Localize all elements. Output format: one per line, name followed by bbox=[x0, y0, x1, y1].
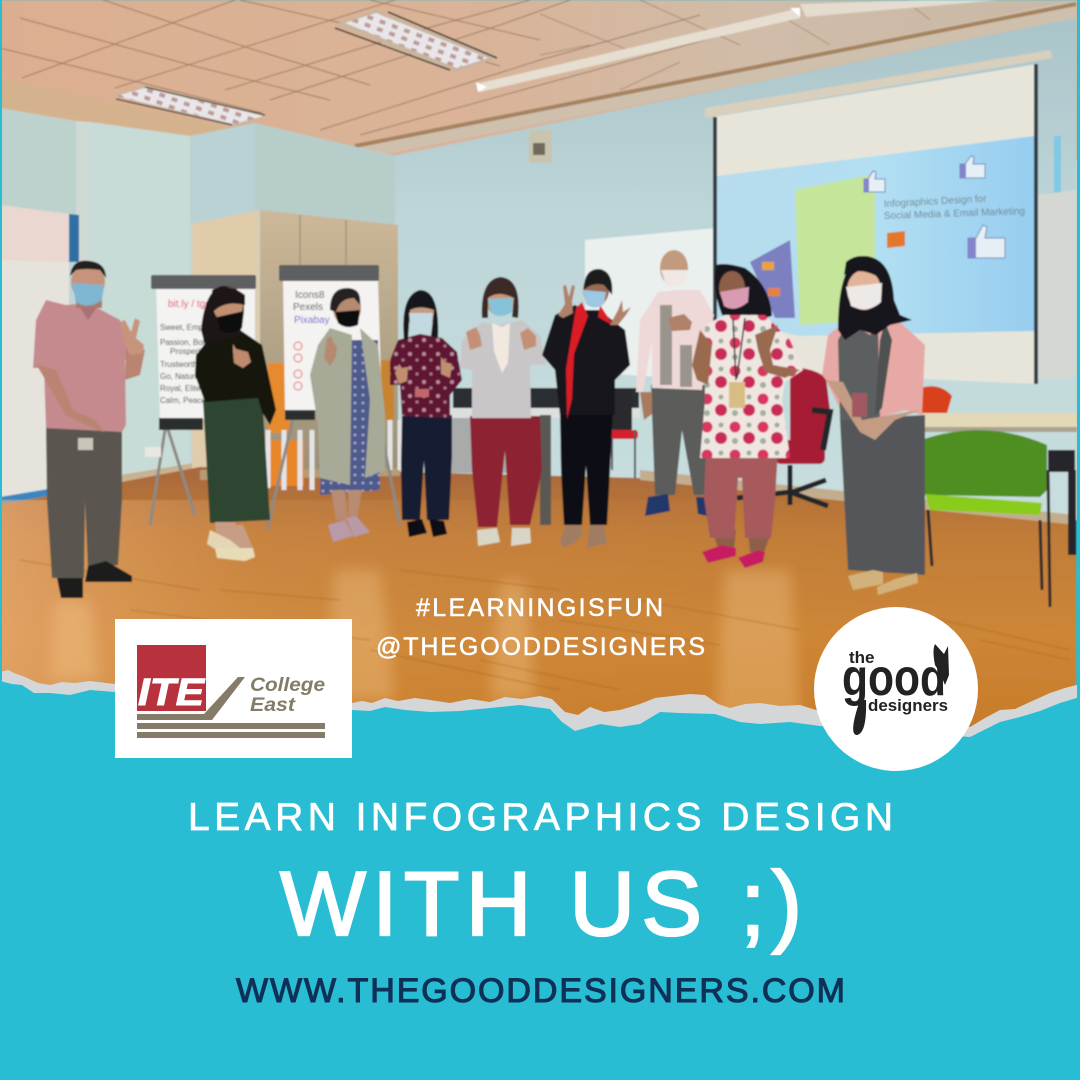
person 2: woman in black top and green skirt bbox=[195, 286, 276, 561]
room: floor bbox=[0, 467, 1076, 745]
flipchart right bbox=[267, 265, 400, 530]
ceiling bulkheads bbox=[0, 78, 232, 140]
projected slide title: Infographics Design for bbox=[884, 194, 988, 210]
flipchart left: Sweet, Empower bbox=[160, 323, 221, 332]
hashtag text bbox=[376, 594, 705, 661]
projector screen bbox=[705, 50, 1076, 384]
table and stacked chairs bbox=[266, 360, 640, 525]
logo stripes bbox=[137, 677, 325, 738]
projected social post panel bbox=[795, 174, 875, 325]
green chair bbox=[920, 430, 1050, 607]
heading: learn infographics design: LEARN INFOGRAPHICS DESIGN bbox=[188, 796, 893, 839]
room: wall base bbox=[0, 100, 1080, 520]
logo: ITE College East: East bbox=[250, 695, 296, 716]
long table right bbox=[920, 413, 1077, 555]
heading: with us: WITH US ;) bbox=[280, 854, 802, 955]
person 4: woman in maroon blouse bbox=[390, 290, 462, 537]
flipchart right: Pexels bbox=[293, 302, 323, 313]
person 3: woman in grey cardigan bbox=[310, 288, 385, 542]
room: ceiling bbox=[0, 0, 1080, 160]
person 8: woman in floral top bbox=[692, 264, 803, 568]
photo: training room group bbox=[0, 0, 1080, 745]
College East wordmark: College bbox=[250, 675, 325, 696]
logo: the good designers: good bbox=[842, 649, 946, 707]
logo: the good designers: the bbox=[849, 648, 874, 667]
ITE red square mark bbox=[137, 645, 206, 714]
logo: ITE College East bbox=[115, 619, 352, 758]
room: left wall and pillars bbox=[0, 108, 395, 505]
person 5: woman in grey blazer bbox=[460, 277, 546, 546]
flipchart left: Go, Nature bbox=[160, 372, 200, 381]
wall socket bbox=[145, 447, 161, 457]
flipchart left: Royal, Elite bbox=[160, 384, 201, 393]
ITE red square mark: ITE bbox=[138, 672, 206, 714]
flipchart left bbox=[150, 275, 256, 525]
orange seat behind bbox=[920, 386, 952, 420]
hashtag text: #LEARNINGISFUN bbox=[416, 594, 663, 622]
room: back wall bbox=[392, 18, 1076, 530]
projected colourful phone graphic bbox=[750, 240, 795, 318]
room: wall sensor box bbox=[529, 130, 552, 163]
hashtag text: @THEGOODDESIGNERS bbox=[376, 633, 705, 661]
person 6: woman in black jacket bbox=[542, 269, 631, 548]
flipchart left: Trustworthy bbox=[160, 360, 202, 369]
website url: WWW.THEGOODDESIGNERS.COM bbox=[236, 972, 845, 1010]
red office chair bbox=[737, 367, 830, 506]
flipchart right: Pixabay bbox=[294, 315, 330, 326]
room: whiteboard bbox=[585, 228, 716, 380]
ceiling lights bbox=[112, 0, 1000, 127]
person 9: woman in pink cardigan bbox=[822, 256, 925, 595]
projector screen: Social Media & Email Marketing bbox=[884, 206, 1025, 222]
flipchart left: bit.ly / tgd- bbox=[168, 299, 214, 310]
flipchart left: Passion, Bold, bbox=[160, 338, 211, 347]
projected thumbs-up icons bbox=[864, 156, 1005, 258]
person 1: man in pink shirt bbox=[33, 261, 145, 598]
logo: the good designers: designers bbox=[868, 696, 948, 715]
flipchart right: Icons8 bbox=[295, 290, 325, 301]
room: wood panel cabinets bbox=[192, 210, 398, 470]
person 7: man in patterned shirt bbox=[636, 250, 714, 517]
flipchart left: Calm, Peace bbox=[160, 396, 206, 405]
flipchart left: Prosperity bbox=[170, 347, 206, 356]
logo: the good designers bbox=[814, 607, 978, 771]
